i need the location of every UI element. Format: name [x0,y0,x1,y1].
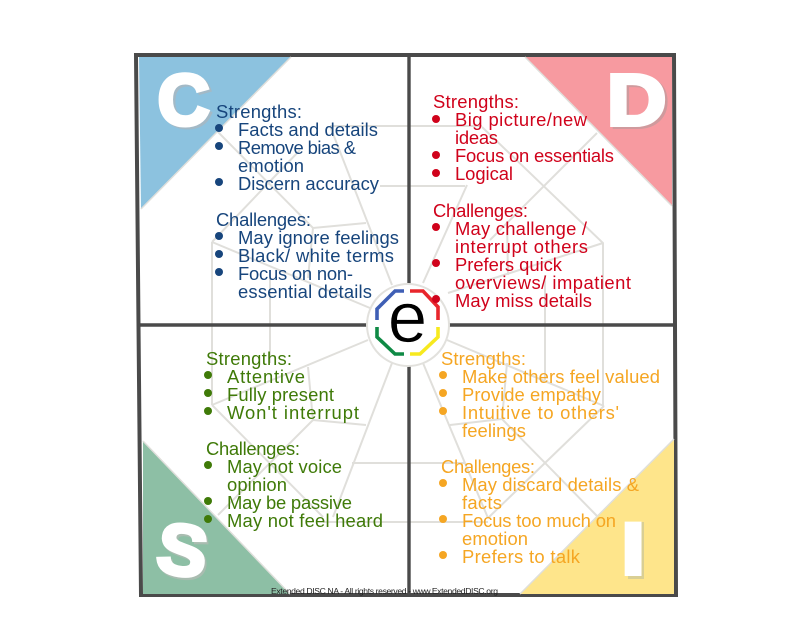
I strengths and challenges list: Prefers to talk [462,546,581,567]
S strengths and challenges list: Strengths: [206,348,292,369]
I strengths and challenges list: Make others feel valued [462,366,660,387]
center logo [367,279,449,366]
S strengths and challenges list: May be passive [227,492,352,513]
panel: D quadrant [432,57,672,311]
C corner triangle [139,57,291,209]
D strengths and challenges list: Logical [455,163,513,184]
D strengths and challenges list: interrupt others [455,236,588,257]
C strengths and challenges list [215,101,399,302]
background web diagram [212,126,604,522]
frame and quadrant dividers [136,55,676,595]
I strengths and challenges list: emotion [462,528,528,549]
logo octagon: green [377,327,404,354]
C strengths and challenges list: Strengths: [216,101,302,122]
I strengths and challenges list [439,348,660,567]
panel: S quadrant [143,348,383,596]
I corner triangle [520,439,674,594]
D strengths and challenges list: Challenges: [433,200,528,221]
C strengths and challenges list: essential details [238,281,372,302]
C letter: C [158,61,210,141]
logo letter e: e [388,279,427,358]
S triangle edge [143,441,290,594]
C letter: C [160,63,212,143]
S strengths and challenges list: May not voice [227,456,342,477]
S strengths and challenges list [204,348,383,531]
I strengths and challenges list: Provide empathy [462,384,602,405]
D triangle edge [525,57,672,206]
D strengths and challenges list: Prefers quick [455,254,563,275]
I strengths and challenges list: Intuitive to others' [462,402,619,423]
S strengths and challenges list: Won't interrupt [227,402,359,423]
footer copyright: Extended DISC NA - All rights reserved - www.ExtendedDISC.org [271,586,498,596]
D strengths and challenges list: Big picture/new [455,109,588,130]
I strengths and challenges list: Strengths: [441,348,526,369]
S strengths and challenges list: opinion [227,474,287,495]
I strengths and challenges list: Focus too much on [462,510,616,531]
C strengths and challenges list: Facts and details [238,119,378,140]
C strengths and challenges list: emotion [238,155,304,176]
S letter: S [152,508,212,594]
C strengths and challenges list: Challenges: [216,209,311,230]
logo octagon: yellow [410,327,438,354]
D strengths and challenges list: Focus on essentials [455,145,614,166]
C strengths and challenges list: Focus on non- [238,263,353,284]
D letter: D [607,61,666,141]
I strengths and challenges list: Challenges: [441,456,535,477]
D strengths and challenges list: Strengths: [433,91,519,112]
S strengths and challenges list: Fully present [227,384,334,405]
D corner triangle [525,57,672,206]
D strengths and challenges list: overviews/ impatient [455,272,631,293]
I triangle edge [520,439,674,594]
panel: I quadrant [439,348,674,594]
D strengths and challenges list: May miss details [455,290,592,311]
logo octagon: blue [377,291,404,320]
I strengths and challenges list: feelings [462,420,526,441]
D strengths and challenges list: ideas [455,127,498,148]
S corner triangle [143,441,290,594]
I letter: I [619,506,647,591]
C strengths and challenges list: May ignore feelings [238,227,399,248]
S strengths and challenges list: Challenges: [206,438,300,459]
panel: C quadrant [139,57,399,302]
S strengths and challenges list: Attentive [227,366,305,387]
I strengths and challenges list: May discard details & [462,474,639,495]
logo circle [367,284,449,366]
D letter: D [610,63,669,143]
C strengths and challenges list: Discern accuracy [238,173,380,194]
logo octagon: red [410,291,438,320]
S strengths and challenges list: May not feel heard [227,510,383,531]
S letter: S [154,510,214,596]
C triangle edge [141,57,291,209]
C strengths and challenges list: Black/ white terms [238,245,394,266]
D strengths and challenges list [432,91,631,311]
C strengths and challenges list: Remove bias & [238,137,356,158]
I strengths and challenges list: facts [462,492,502,513]
D strengths and challenges list: May challenge / [455,218,588,239]
